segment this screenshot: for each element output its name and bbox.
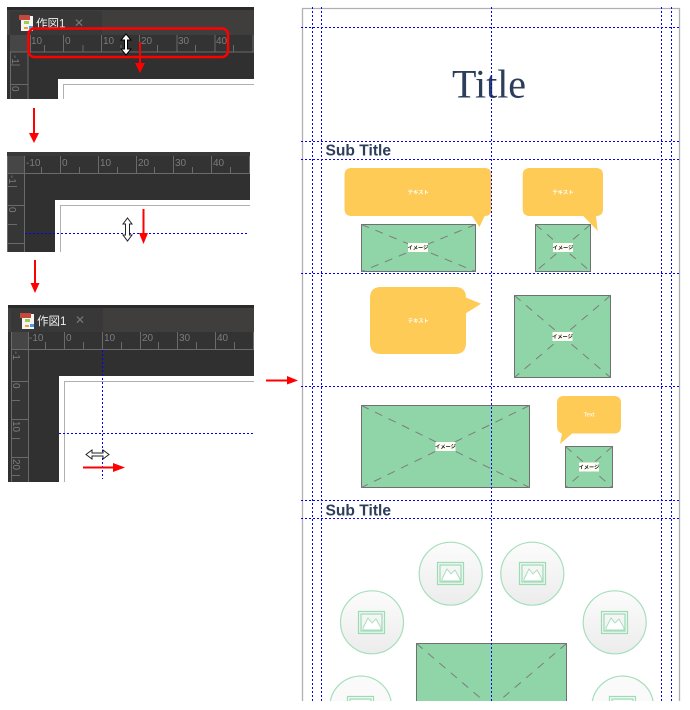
screenshot: step 2 horizontal guide placed xyxy=(6,152,250,252)
callout: red highlight around ruler xyxy=(28,28,228,57)
ruler labels: -1 xyxy=(10,351,21,360)
arrow: step 2 to step 3 xyxy=(30,260,40,293)
title: Title xyxy=(452,62,526,106)
ruler labels: 30 xyxy=(178,36,190,47)
icon circle 2 xyxy=(501,542,564,605)
ruler labels: 0 xyxy=(66,333,72,344)
ruler labels: 0 xyxy=(10,383,21,389)
ruler labels: 20 xyxy=(142,333,154,344)
tab title: 作図1 xyxy=(37,315,66,328)
bubble: small text: Text xyxy=(583,412,595,418)
ruler labels: -10 xyxy=(26,158,41,169)
ruler labels: 10 xyxy=(10,421,21,433)
tab close mark: ✕ xyxy=(75,313,85,327)
arrow: step 1 to step 2 xyxy=(29,108,39,143)
icon circle 4 xyxy=(583,591,646,654)
bubble: top right: テキスト xyxy=(552,189,574,196)
icon: vertical resize cursor xyxy=(121,34,131,55)
icon circle 1 xyxy=(419,542,482,605)
ruler labels: 10 xyxy=(103,36,115,47)
ruler labels: 30 xyxy=(175,158,187,169)
ruler labels: -1 xyxy=(9,55,20,64)
tab close mark: ✕ xyxy=(74,16,84,30)
icon circle 6 xyxy=(592,676,653,701)
icon circle 3 xyxy=(340,591,404,654)
subtitle 1: Sub Title xyxy=(326,143,391,160)
image placeholder 1 xyxy=(362,224,476,272)
icon: hollow horizontal resize cursor xyxy=(86,450,109,459)
ruler labels: 20 xyxy=(10,459,21,471)
subtitle 2: Sub Title xyxy=(326,503,391,520)
image placeholder 3 xyxy=(514,296,610,378)
icon: document tab icon xyxy=(19,15,33,31)
arrow: drag right xyxy=(83,463,125,472)
ruler labels xyxy=(6,158,225,213)
ruler labels: 40 xyxy=(213,158,225,169)
bubble: wide text top left xyxy=(344,168,492,227)
ruler labels: 0 xyxy=(9,86,20,92)
image placeholder 2 xyxy=(536,224,590,272)
icon circle 5 xyxy=(330,676,391,701)
ruler labels: 30 xyxy=(179,333,191,344)
arrow: drag down xyxy=(135,42,145,73)
screenshot: step 1 dragging guide from ruler xyxy=(7,7,254,99)
ruler labels: 10 xyxy=(31,36,43,47)
page frame xyxy=(302,8,680,701)
image placeholder 5 xyxy=(566,446,612,488)
bubble: top right xyxy=(523,168,603,231)
panel: page layout with guides xyxy=(301,7,680,701)
ruler labels: -1 xyxy=(6,175,17,184)
ruler labels: 0 xyxy=(65,36,71,47)
bubble: middle with right tail xyxy=(370,287,481,354)
image placeholder 2: イメージ xyxy=(553,244,573,252)
icon: hollow vertical resize cursor xyxy=(123,218,132,241)
tab title: 作図1 xyxy=(36,18,65,30)
image placeholder 1: イメージ xyxy=(408,244,428,252)
ruler labels: 20 xyxy=(141,36,153,47)
ruler labels: 40 xyxy=(217,333,229,344)
screenshot: step 3 vertical guide placed xyxy=(8,305,254,482)
image placeholder 3: イメージ xyxy=(552,334,573,340)
ruler labels xyxy=(9,36,228,92)
image placeholder 6 center xyxy=(416,644,566,701)
icon: document tab icon xyxy=(20,313,34,329)
ruler labels xyxy=(10,333,229,471)
ruler labels: 40 xyxy=(216,36,228,47)
ruler labels: 0 xyxy=(6,207,17,213)
ruler labels: 0 xyxy=(62,158,68,169)
bubble: middle with right tail: テキスト xyxy=(408,318,429,325)
guides: vertical and horizontal xyxy=(59,350,254,479)
guide lines xyxy=(301,7,679,701)
arrow: to finished layout xyxy=(266,376,298,384)
bubble: wide text top left: テキスト xyxy=(408,189,429,196)
ruler labels: -10 xyxy=(29,333,44,344)
image placeholder 5: イメージ xyxy=(579,464,599,471)
image placeholder 4 xyxy=(362,406,530,488)
arrow: drag down xyxy=(139,209,148,244)
bubble: small text xyxy=(557,396,621,444)
ruler labels: 10 xyxy=(104,333,116,344)
ruler labels: 20 xyxy=(138,158,150,169)
image placeholder 4: イメージ xyxy=(435,444,456,450)
ruler labels: 10 xyxy=(100,158,112,169)
guide: horizontal xyxy=(25,232,248,234)
